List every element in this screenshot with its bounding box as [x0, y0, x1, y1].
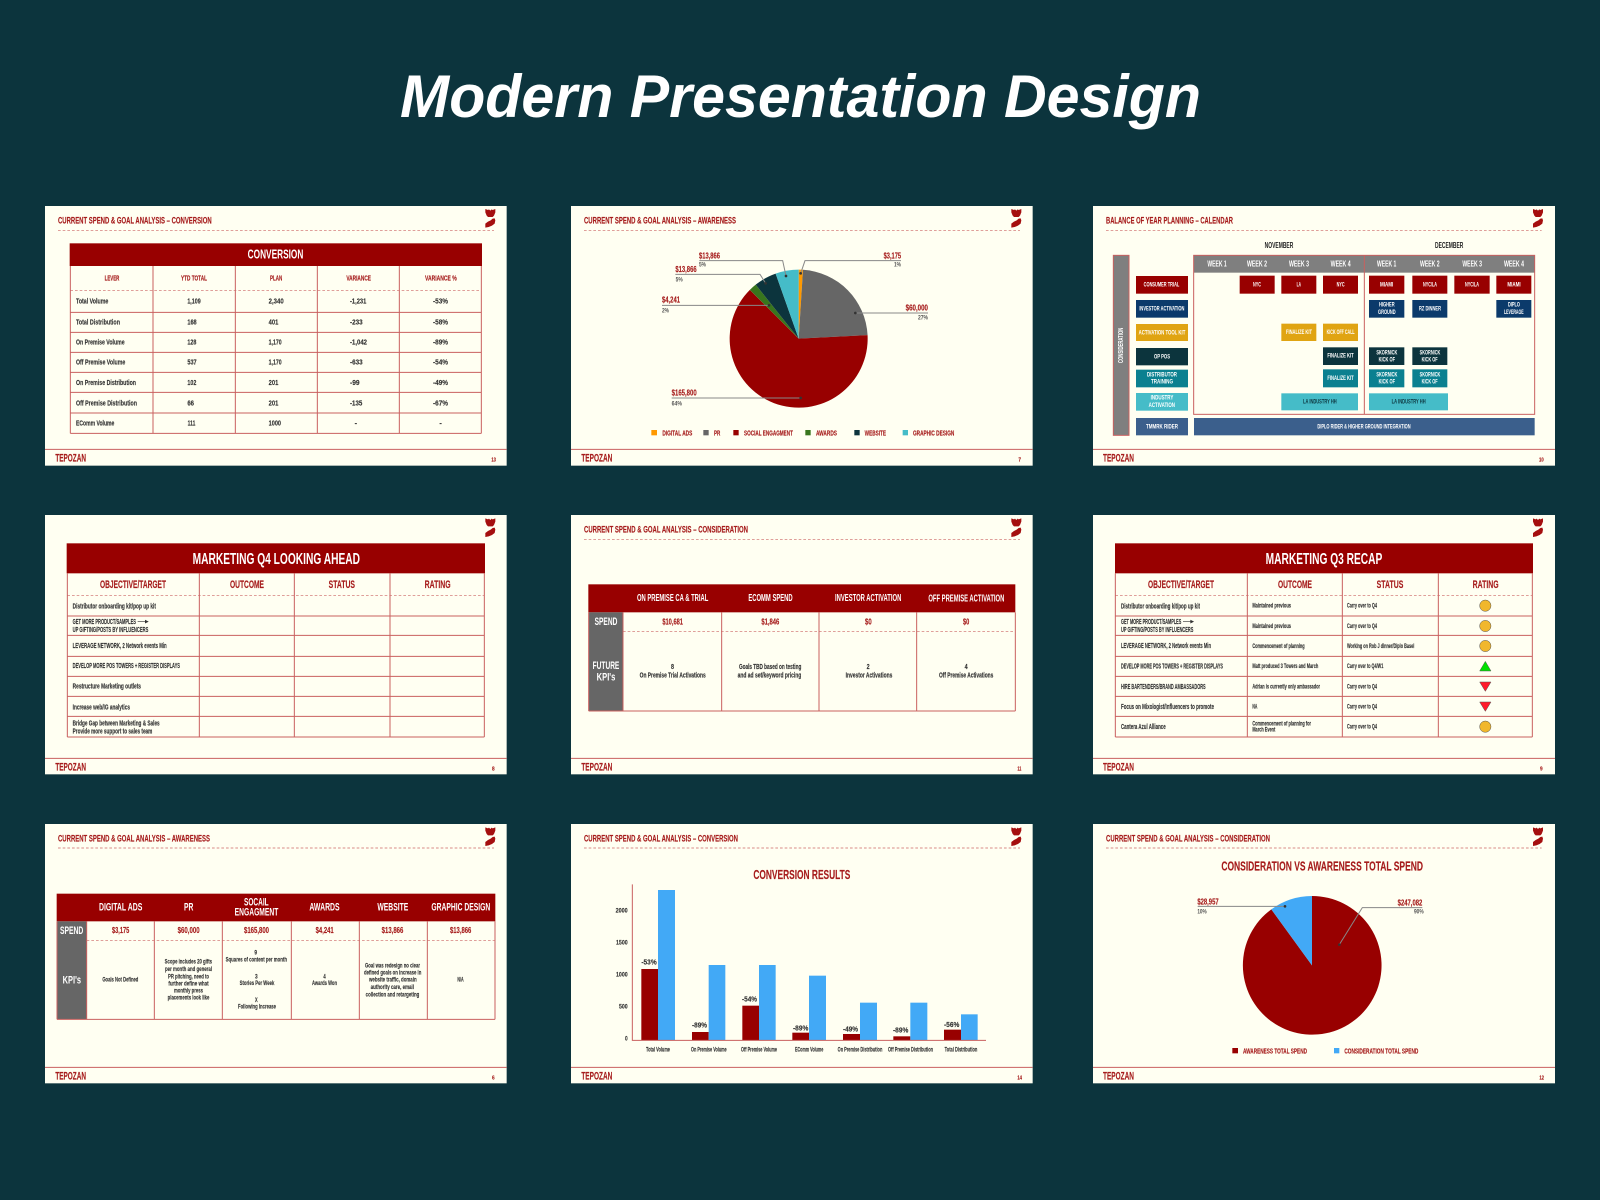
- table: awareness KPIs: collection and retargeting: [366, 991, 419, 998]
- table: conversion: Off Premise Distribution: [76, 398, 137, 407]
- table: awareness KPIs: Scope includes 20 gifts: [165, 959, 212, 966]
- bar chart: On Premise Volume: [691, 1046, 727, 1053]
- footer: TEPOZAN: [581, 453, 612, 465]
- table: Q3 recap: Carry over to Q4/W1: [1347, 664, 1384, 670]
- table: Q3 recap: Carry over to Q4: [1347, 684, 1377, 690]
- footer: [571, 449, 1033, 465]
- calendar events: MIAMI: [1380, 281, 1393, 288]
- panel: slide conversion table: [45, 206, 507, 466]
- table: consideration KPIs: ON PREMISE CA & TRIAL: [637, 593, 708, 604]
- calendar events: NYC: [1337, 281, 1345, 288]
- icon: logo: [1533, 209, 1543, 228]
- calendar: WEEK 2: [1420, 258, 1440, 268]
- table: awareness KPIs: SPEND: [60, 925, 84, 937]
- table: conversion: -53%: [433, 296, 448, 305]
- callouts: $247,082: [1398, 899, 1423, 908]
- table: conversion: 2,340: [269, 296, 284, 305]
- legend: [1232, 1046, 1419, 1055]
- table: Q4 objectives: Increase web/IG analytics: [73, 702, 130, 711]
- chart title: CONSIDERATION VS AWARENESS TOTAL SPEND: [1221, 859, 1423, 873]
- footer: 13: [491, 457, 496, 463]
- callouts: $13,866: [675, 265, 697, 274]
- table: conversion: LEVER: [105, 274, 120, 283]
- table: conversion: 537: [187, 358, 197, 367]
- callouts: 5%: [699, 262, 707, 268]
- table: awareness KPIs: Goals Not Defined: [102, 977, 138, 984]
- table: conversion: YTD TOTAL: [181, 274, 207, 283]
- table: consideration KPIs: FUTURE: [593, 660, 619, 672]
- calendar events: KICK OF: [1379, 379, 1395, 386]
- table: conversion: -: [439, 419, 442, 428]
- footer: TEPOZAN: [55, 453, 86, 465]
- calendar events: SKORNICK: [1420, 371, 1441, 378]
- table: conversion: Total Volume: [76, 296, 108, 305]
- calendar events: FINALIZE KIT: [1327, 375, 1354, 382]
- table: conversion: EComm Volume: [76, 419, 114, 428]
- table: consideration KPIs: Off Premise Activations: [939, 672, 993, 679]
- bar chart: 1000: [616, 972, 628, 979]
- table: consideration KPIs: INVESTOR ACTIVATION: [835, 593, 901, 604]
- slide heading: CURRENT SPEND & GOAL ANALYSIS – CONSIDERATION: [584, 525, 748, 535]
- callouts: 90%: [1414, 910, 1424, 916]
- table: awareness KPIs: $60,000: [178, 926, 200, 935]
- calendar: WEEK 3: [1462, 258, 1482, 268]
- table: Q3 recap: Adrian is currently only ambassador: [1252, 684, 1320, 690]
- table: awareness KPIs: $165,800: [244, 926, 269, 935]
- slide heading: CURRENT SPEND & GOAL ANALYSIS – AWARENESS: [58, 834, 210, 844]
- table: awareness KPIs: Following Increase: [238, 1004, 276, 1011]
- table: awareness KPIs: 3: [255, 973, 258, 980]
- table: awareness KPIs: WEBSITE: [377, 902, 409, 914]
- table: awareness KPIs: Squares of content per month: [226, 957, 287, 964]
- calendar events: NYC: [1253, 281, 1261, 288]
- table: Q4 objectives: MARKETING Q4 LOOKING AHEAD: [193, 551, 360, 568]
- table: awareness KPIs: 4: [323, 973, 326, 980]
- table: awareness KPIs: 9: [254, 950, 257, 957]
- table: consideration KPIs: Investor Activations: [846, 672, 892, 679]
- legend: GRAPHIC DESIGN: [913, 429, 955, 438]
- table: conversion: PLAN: [270, 274, 282, 283]
- row labels: [1136, 276, 1188, 435]
- calendar: WEEK 4: [1331, 258, 1351, 268]
- table: conversion: Off Premise Volume: [76, 358, 125, 367]
- table: Q3 recap: HIRE BARTENDERS/BRAND AMBASSADORS: [1121, 682, 1206, 691]
- table: awareness KPIs: KPI's: [63, 974, 81, 986]
- table: consideration KPIs: KPI's: [597, 671, 615, 683]
- table: awareness KPIs: [57, 894, 495, 1019]
- table: consideration KPIs: 8: [671, 664, 674, 671]
- legend: SOCIAL ENGAGMENT: [744, 429, 793, 438]
- table: Q3 recap: STATUS: [1377, 579, 1403, 591]
- bar chart: -54%: [742, 994, 757, 1003]
- bar chart: On Premise Distribution: [838, 1046, 882, 1053]
- footer: TEPOZAN: [581, 762, 612, 774]
- table: Q3 recap: Carry over to Q4: [1347, 624, 1377, 630]
- table: Q3 recap: DEVELOP MORE POS TOWERS + REGISTER DISPLAYS: [1121, 662, 1223, 671]
- calendar events: RZ DINNER: [1419, 305, 1441, 312]
- slide heading: CURRENT SPEND & GOAL ANALYSIS – CONVERSION: [58, 216, 212, 226]
- footer: TEPOZAN: [1103, 762, 1134, 774]
- bar chart: -89%: [793, 1023, 809, 1032]
- table: conversion: -58%: [433, 318, 448, 327]
- footer: [571, 1067, 1033, 1083]
- footer: [1093, 449, 1555, 465]
- icon: logo: [485, 827, 495, 846]
- table: Q3 recap: Maintained previous: [1252, 604, 1291, 610]
- table: awareness KPIs: Stories Per Week: [240, 980, 275, 987]
- row labels: TRAINING: [1151, 379, 1173, 386]
- table: awareness KPIs: $13,866: [450, 926, 472, 935]
- calendar: WEEK 1: [1207, 258, 1227, 268]
- table: conversion: 1,170: [269, 338, 282, 347]
- calendar events: KICK OF: [1379, 357, 1395, 364]
- footer: 6: [492, 1075, 495, 1081]
- icon: logo: [1533, 827, 1543, 846]
- bar chart: -89%: [692, 1021, 707, 1030]
- table: conversion: VARIANCE %: [425, 274, 457, 283]
- table: Q4 objectives: LEVERAGE NETWORK, 2 Network events Min: [73, 641, 167, 650]
- callouts: 64%: [672, 401, 683, 407]
- table: awareness KPIs: X: [255, 997, 258, 1004]
- table: consideration KPIs: 2: [867, 664, 870, 671]
- legend: CONSIDERATION TOTAL SPEND: [1344, 1046, 1419, 1055]
- table: Q4 objectives: OBJECTIVE/TARGET: [100, 579, 166, 591]
- table: Q3 recap: [1115, 543, 1533, 737]
- bar chart: Off Premise Distribution: [888, 1046, 933, 1053]
- calendar: WEEK 3: [1289, 258, 1309, 268]
- table: conversion: 1,170: [269, 358, 282, 367]
- table: awareness KPIs: N/A: [457, 977, 464, 984]
- table: consideration KPIs: Goals TBD based on testing: [739, 664, 801, 671]
- table: awareness KPIs: monthly press: [174, 988, 203, 995]
- table: Q3 recap: Working on Rob J dinner/Diplo Basel: [1347, 644, 1415, 650]
- bar chart: 0: [625, 1036, 628, 1043]
- table: conversion: -99: [350, 378, 360, 387]
- callouts: [1197, 898, 1424, 946]
- footer: [1093, 758, 1555, 774]
- table: Q4 objectives: DEVELOP MORE POS TOWERS + REGISTER DISPLAYS: [73, 661, 180, 670]
- icon: logo: [1533, 518, 1543, 537]
- table: awareness KPIs: SOCAIL: [244, 897, 269, 909]
- table: awareness KPIs: $4,241: [316, 926, 334, 935]
- panel: slide consideration vs awareness pie: [1093, 824, 1555, 1083]
- slide heading: CURRENT SPEND & GOAL ANALYSIS – CONSIDERATION: [1106, 834, 1270, 844]
- calendar events: MIAMI: [1507, 281, 1521, 288]
- callouts: 2%: [662, 309, 670, 315]
- table: Q4 objectives: [67, 543, 485, 737]
- footer: 11: [1017, 766, 1021, 772]
- bar chart: 500: [619, 1004, 628, 1011]
- table: Q3 recap: Distributor onboarding kit/pop up kit: [1121, 602, 1200, 611]
- table: Q3 recap: UP GIFTING/POSTS BY INFLUENCERS: [1121, 625, 1193, 634]
- legend: AWARDS: [816, 429, 837, 438]
- table: consideration KPIs: $0: [865, 617, 872, 626]
- calendar events: NYC/LA: [1423, 281, 1437, 288]
- table: Q3 recap: Commencement of planning for: [1252, 722, 1311, 728]
- callouts: $60,000: [906, 304, 928, 313]
- footer: [1093, 1067, 1555, 1083]
- table: awareness KPIs: Goal was redesign no clear: [365, 962, 420, 969]
- pie chart: [730, 270, 868, 408]
- table: consideration KPIs: SPEND: [595, 616, 618, 628]
- table: Q3 recap: Carry over to Q4: [1347, 704, 1377, 710]
- rating icons: [1480, 600, 1491, 732]
- footer: TEPOZAN: [581, 1071, 612, 1083]
- calendar events: KICK OF: [1422, 379, 1438, 386]
- calendar events: HIGHER: [1379, 302, 1395, 309]
- panel: slide awareness pie: [571, 206, 1033, 466]
- table: awareness KPIs: Awards Won: [312, 980, 337, 987]
- pie chart: [1243, 896, 1382, 1035]
- table: consideration KPIs: $0: [963, 617, 970, 626]
- table: Q4 objectives: GET MORE PRODUCT/SAMPLES: [73, 617, 136, 626]
- table: Q4 objectives: Distributor onboarding kit/pop up kit: [73, 602, 156, 611]
- calendar events: LEVERAGE: [1504, 309, 1524, 316]
- row labels: ACTIVATION TOOL KIT: [1139, 329, 1185, 336]
- table: awareness KPIs: further define what: [168, 980, 209, 987]
- table: conversion: -1,042: [350, 338, 367, 347]
- calendar events: DIPLO RIDER & HIGHER GROUND INTEGRATION: [1317, 423, 1411, 430]
- calendar events: DIPLO: [1508, 302, 1520, 309]
- icon: logo: [1011, 518, 1021, 537]
- footer: [571, 758, 1033, 774]
- table: conversion: 168: [187, 318, 197, 327]
- table: Q3 recap: Focus on Mixologist/Influencers to promote: [1121, 702, 1214, 711]
- bar chart: Total Volume: [646, 1046, 670, 1053]
- table: awareness KPIs: website traffic, domain: [368, 977, 417, 984]
- icon: logo: [485, 518, 495, 537]
- table: Q3 recap: OBJECTIVE/TARGET: [1148, 579, 1214, 591]
- table: conversion: 1000: [269, 419, 281, 428]
- table: conversion: -233: [350, 318, 363, 327]
- bar chart: 2000: [616, 908, 628, 915]
- table: conversion: -67%: [433, 398, 448, 407]
- table: conversion: -: [355, 419, 358, 428]
- footer: [45, 449, 507, 465]
- table: Q3 recap: Carry over to Q4: [1347, 725, 1377, 731]
- calendar: [1113, 241, 1535, 435]
- calendar: WEEK 4: [1504, 258, 1524, 268]
- table: Q3 recap: RATING: [1473, 579, 1499, 591]
- table: consideration KPIs: 4: [965, 664, 968, 671]
- table: consideration KPIs: OFF PREMISE ACTIVATION: [928, 594, 1004, 605]
- bar chart: Off Premise Volume: [741, 1046, 777, 1053]
- legend: WEBSITE: [865, 429, 886, 438]
- calendar: NOVEMBER: [1265, 241, 1293, 250]
- table: consideration KPIs: ECOMM SPEND: [748, 593, 793, 604]
- icon: logo: [1011, 827, 1021, 846]
- table: Q3 recap: LEVERAGE NETWORK, 2 Network events Min: [1121, 641, 1211, 650]
- calendar: WEEK 2: [1247, 258, 1267, 268]
- table: Q3 recap: NA: [1252, 704, 1258, 710]
- table: consideration KPIs: and ad set/keyword pricing: [738, 672, 801, 679]
- table: awareness KPIs: placements look like: [168, 995, 210, 1002]
- legend: PR: [714, 429, 721, 438]
- footer: 12: [1539, 1075, 1544, 1081]
- bar chart: 1500: [616, 940, 628, 947]
- footer: [45, 758, 507, 774]
- row labels: INVESTOR ACTIVATION: [1139, 306, 1184, 313]
- bar chart: Total Distribution: [945, 1046, 977, 1053]
- table: Q3 recap: March Event: [1252, 727, 1275, 733]
- calendar events: LA INDUSTRY HH: [1392, 399, 1426, 406]
- panel: slide consideration table: [571, 515, 1033, 774]
- row labels: INDUSTRY: [1151, 395, 1174, 402]
- bar chart: -53%: [641, 958, 657, 967]
- table: Q3 recap: Cantera Azul Alliance: [1121, 722, 1166, 731]
- bar chart: -89%: [893, 1025, 909, 1034]
- footer: TEPOZAN: [55, 762, 86, 774]
- callouts: 1%: [894, 263, 902, 269]
- callouts: 10%: [1197, 910, 1207, 916]
- calendar: DECEMBER: [1435, 241, 1463, 250]
- calendar events: KICK OF: [1422, 357, 1438, 364]
- table: Q3 recap: Commencement of planning: [1252, 644, 1305, 650]
- footer: 9: [1540, 766, 1543, 772]
- calendar events: LA INDUSTRY HH: [1303, 399, 1337, 406]
- footer: TEPOZAN: [1103, 453, 1134, 465]
- panel: slide Q4 looking ahead: [45, 515, 507, 774]
- table: Q4 objectives: UP GIFTING/POSTS BY INFLUENCERS: [73, 625, 148, 634]
- table: Q3 recap: GET MORE PRODUCT/SAMPLES: [1121, 617, 1181, 626]
- table: awareness KPIs: $3,175: [112, 926, 130, 935]
- table: conversion: 201: [269, 398, 278, 407]
- callouts: 5%: [676, 278, 683, 284]
- table: awareness KPIs: PR pitching, need to: [168, 973, 209, 980]
- panel: slide conversion results bar chart: [571, 824, 1033, 1083]
- icon: logo: [1011, 209, 1021, 228]
- callouts: $4,241: [662, 296, 680, 305]
- table: consideration KPIs: On Premise Trial Activations: [640, 672, 706, 679]
- panel: slide calendar: [1093, 206, 1555, 466]
- footer: TEPOZAN: [1103, 1071, 1134, 1083]
- table: Q4 objectives: OUTCOME: [230, 579, 264, 591]
- table: Q4 objectives: Restructure Marketing outlets: [73, 682, 141, 691]
- row labels: ACTIVATION: [1149, 402, 1175, 409]
- table: consideration KPIs: $10,681: [662, 617, 683, 626]
- table: conversion: -89%: [433, 338, 448, 347]
- legend: [651, 429, 955, 438]
- table: conversion: On Premise Distribution: [76, 378, 136, 387]
- calendar events: SKORNICK: [1376, 371, 1398, 378]
- slide heading: CURRENT SPEND & GOAL ANALYSIS – AWARENESS: [584, 216, 736, 226]
- table: conversion: CONVERSION: [248, 248, 303, 262]
- table: conversion: -49%: [433, 378, 448, 387]
- calendar events: FINALIZE KIT: [1286, 329, 1312, 336]
- table: conversion: 401: [269, 318, 278, 327]
- table: awareness KPIs: ENGAGMENT: [235, 906, 278, 918]
- footer: 10: [1539, 457, 1544, 463]
- table: awareness KPIs: authority care, email: [371, 984, 414, 991]
- calendar events: SKORNICK: [1420, 349, 1441, 356]
- table: Q4 objectives: STATUS: [329, 579, 355, 591]
- table: awareness KPIs: DIGITAL ADS: [99, 902, 143, 914]
- calendar: WEEK 1: [1377, 258, 1397, 268]
- calendar events: LA: [1297, 281, 1301, 288]
- table: awareness KPIs: defined goals on increase in: [364, 970, 421, 977]
- table: conversion: On Premise Volume: [76, 338, 125, 347]
- bar chart: -49%: [843, 1025, 858, 1034]
- table: awareness KPIs: $13,866: [382, 926, 404, 935]
- table: Q3 recap: Carry over to Q4: [1347, 604, 1377, 610]
- icon: logo: [485, 209, 495, 228]
- calendar events: GROUND: [1378, 309, 1396, 316]
- table: conversion: 128: [187, 338, 196, 347]
- table: awareness KPIs: per month and general: [165, 966, 212, 973]
- callouts: $13,866: [699, 251, 720, 260]
- footer: 8: [492, 766, 495, 772]
- callouts: [662, 251, 929, 407]
- table: Q4 objectives: Bridge Gap between Marketing & Sales: [73, 718, 160, 727]
- table: conversion: 201: [269, 378, 278, 387]
- legend: AWARENESS TOTAL SPEND: [1243, 1046, 1307, 1055]
- table: consideration KPIs: $1,846: [761, 617, 780, 626]
- table: conversion: Total Distribution: [76, 318, 120, 327]
- table: conversion: -1,231: [350, 296, 366, 305]
- row labels: TMMRK RIDER: [1146, 423, 1178, 430]
- table: consideration KPIs: [588, 584, 1015, 711]
- bar chart: -56%: [944, 1020, 960, 1029]
- table: conversion: -633: [350, 358, 363, 367]
- table: awareness KPIs: AWARDS: [309, 902, 340, 914]
- table: Q4 objectives: Provide more support to sales team: [73, 726, 153, 735]
- panel: slide Q3 recap: [1093, 515, 1555, 774]
- title: Modern Presentation Design: [400, 63, 1201, 130]
- calendar events: KICK OFF CALL: [1327, 329, 1355, 336]
- row labels: DISTRIBUTOR: [1147, 371, 1177, 378]
- calendar: CONSIDERATION: [1116, 328, 1125, 363]
- table: Q3 recap: Maintained previous: [1252, 624, 1291, 630]
- table: Q3 recap: OUTCOME: [1278, 579, 1312, 591]
- slide heading: CURRENT SPEND & GOAL ANALYSIS – CONVERSION: [584, 834, 738, 844]
- row labels: CONSUMER TRIAL: [1144, 282, 1179, 289]
- table: Q3 recap: Matt produced 3 Towers and March: [1252, 664, 1319, 670]
- calendar events: NYC/LA: [1465, 281, 1479, 288]
- table: conversion: 102: [187, 378, 196, 387]
- calendar events: SKORNICK: [1376, 349, 1398, 356]
- callouts: $3,175: [884, 252, 901, 261]
- callouts: $28,957: [1197, 898, 1219, 907]
- table: Q3 recap: MARKETING Q3 RECAP: [1266, 551, 1383, 568]
- table: awareness KPIs: PR: [184, 902, 193, 914]
- table: conversion: 1,109: [187, 296, 201, 305]
- footer: 14: [1017, 1075, 1023, 1081]
- footer: 7: [1018, 457, 1021, 463]
- bar chart: [616, 884, 986, 1053]
- table: conversion: [70, 243, 482, 433]
- table: conversion: 66: [187, 398, 194, 407]
- table: conversion: VARIANCE: [346, 274, 371, 283]
- callouts: $165,800: [672, 389, 697, 398]
- row labels: OP POS: [1154, 353, 1170, 360]
- legend: DIGITAL ADS: [662, 429, 692, 438]
- footer: TEPOZAN: [55, 1071, 86, 1083]
- table: conversion: -135: [350, 398, 362, 407]
- slide heading: BALANCE OF YEAR PLANNING – CALENDAR: [1106, 216, 1233, 226]
- table: Q4 objectives: RATING: [425, 579, 451, 591]
- callouts: 27%: [918, 315, 929, 321]
- calendar events: [1194, 276, 1535, 435]
- calendar events: FINALIZE KIT: [1327, 353, 1354, 360]
- panel: slide awareness table: [45, 824, 507, 1083]
- table: awareness KPIs: GRAPHIC DESIGN: [431, 902, 490, 914]
- chart title: CONVERSION RESULTS: [753, 868, 850, 882]
- bar chart: EComm Volume: [795, 1046, 824, 1053]
- table: conversion: -54%: [433, 358, 448, 367]
- table: conversion: 111: [188, 419, 195, 428]
- footer: [45, 1067, 507, 1083]
